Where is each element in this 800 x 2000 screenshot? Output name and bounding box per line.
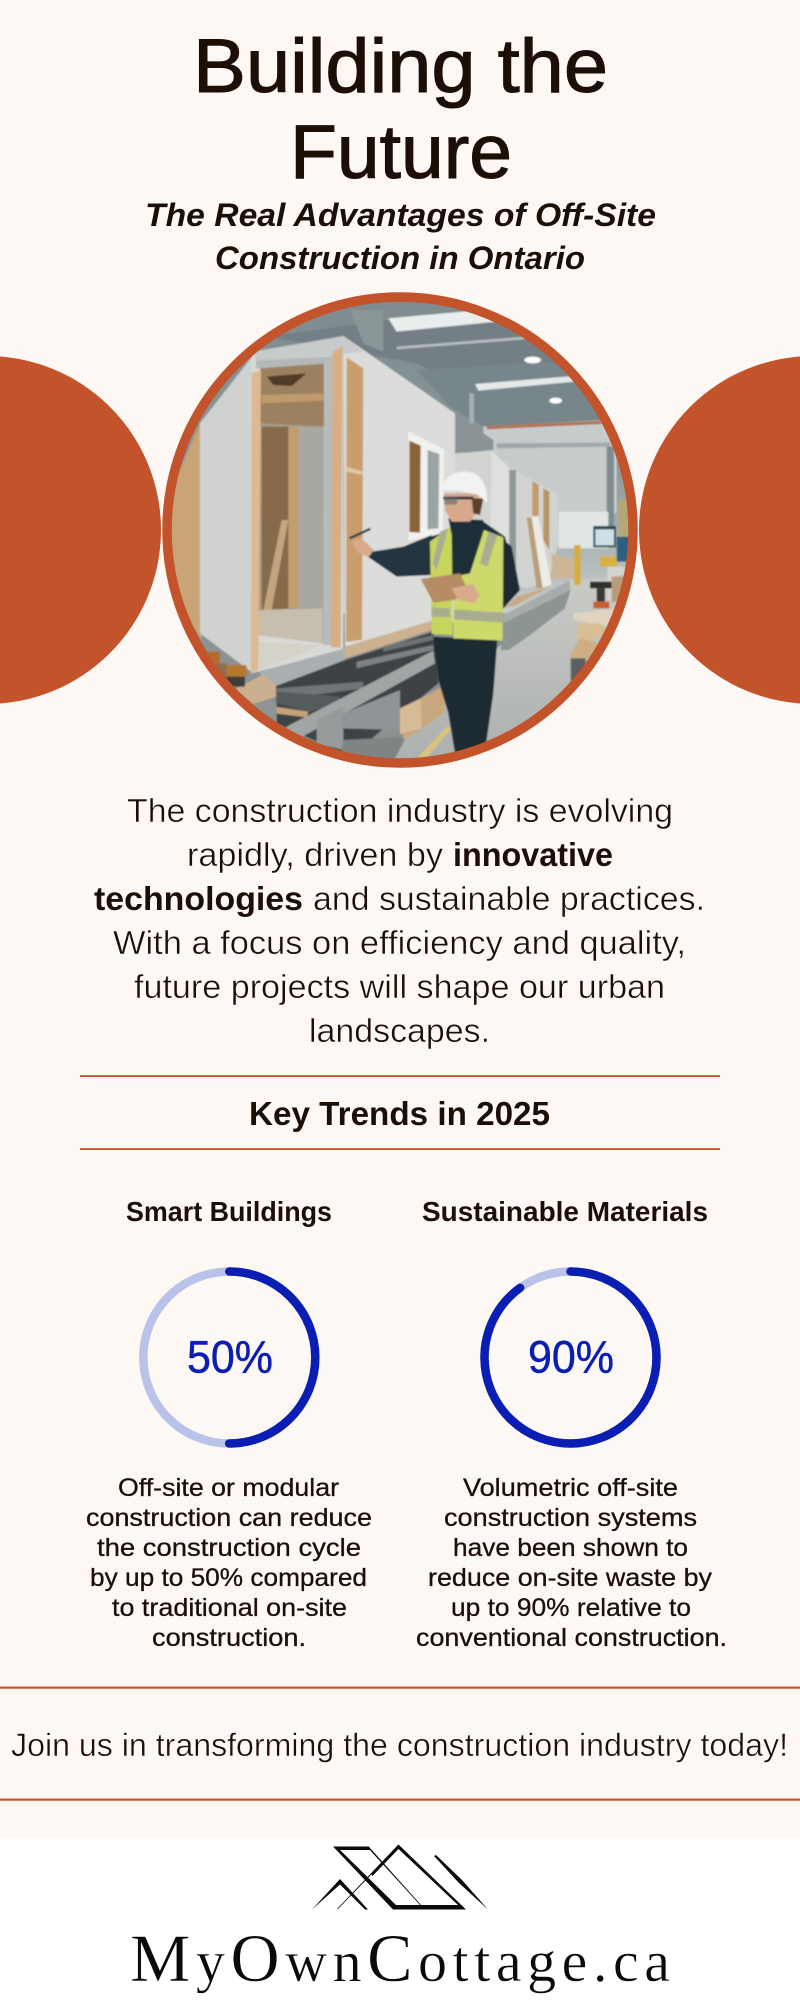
caption: sustainable materials: construction systems [444,1504,697,1532]
intro paragraph: technologies [94,880,303,917]
intro paragraph: The construction industry is evolving [127,792,673,829]
caption: sustainable materials: Volumetric off-site [463,1474,678,1502]
intro paragraph [94,792,705,1049]
call to action: Join us in transforming the construction industry today! [11,1727,788,1763]
factory ceiling and back wall [178,302,628,614]
shop floor [394,578,609,758]
donut chart: 50%: 50% [187,1332,273,1382]
second modules in the distance [455,451,558,588]
trousers [433,637,497,753]
stacked lumber under conveyor [400,686,445,740]
OSB sheathing at far left [170,420,202,640]
photo circle border [167,297,633,763]
logo mark: house roof lines [312,1844,488,1910]
title: Building the [193,24,608,109]
section heading: key trends: Key Trends in 2025 [249,1095,550,1132]
column heading: smart buildings: Smart Buildings [126,1196,332,1227]
caption: smart buildings: construction. [152,1624,306,1652]
pen [349,528,371,539]
caption: smart buildings: construction can reduce [86,1504,372,1532]
donut chart: 50% [143,1272,315,1444]
donut chart: 90%: 90% [528,1332,614,1382]
hard hat [441,472,487,503]
steel table run [501,581,571,650]
title: Future [290,110,512,195]
module window [408,432,444,541]
head and neck [443,493,483,535]
jacket and sleeves [367,522,520,608]
caption: sustainable materials [416,1474,727,1652]
decorative right circle [639,356,800,704]
hi-vis vest [430,526,503,641]
intro paragraph: rapidly, driven by [187,836,444,873]
drill and workbench on the right [571,567,631,682]
lower base behind machinery [190,612,506,748]
decorative left circle [0,356,161,704]
subtitle: Construction in Ontario [215,240,585,276]
caption: smart buildings: to traditional on-site [112,1594,347,1622]
caption: smart buildings [86,1474,372,1652]
column heading: sustainable materials: Sustainable Materials [422,1196,708,1227]
intro paragraph: innovative [453,836,613,873]
donut chart: 90% [484,1272,656,1444]
photo: worker inspecting modular unit in factory [172,302,628,758]
subtitle [145,197,656,276]
footer white band [0,1838,800,2000]
intro paragraph: With a focus on efficiency and quality, [113,924,686,961]
clipboard [421,573,467,603]
caption: sustainable materials: conventional construction. [416,1624,727,1652]
subtitle: The Real Advantages of Off-Site [145,197,656,233]
steel sill and wood sole plate [258,621,432,686]
caption: smart buildings: the construction cycle [97,1534,361,1562]
caption: sustainable materials: have been shown to [453,1534,688,1562]
floor marking [415,727,452,760]
background equipment [552,500,630,585]
intro paragraph: and sustainable practices. [313,880,705,917]
conveyor rails and rollers [276,632,440,758]
intro paragraph: landscapes. [309,1012,490,1049]
caption: smart buildings: by up to 50% compared [90,1564,367,1592]
worker figure [349,472,520,753]
tools and wood block at lower left [207,651,278,714]
caption: smart buildings: Off-site or modular [118,1474,339,1502]
logo wordmark: MyOwnCottage.ca [130,1920,670,1996]
hands [352,538,479,603]
modular unit shell [200,336,455,673]
caption: sustainable materials: reduce on-site waste by [428,1564,713,1592]
title [193,24,608,195]
intro paragraph: future projects will shape our urban [134,968,665,1005]
caption: sustainable materials: up to 90% relative to [451,1594,691,1622]
